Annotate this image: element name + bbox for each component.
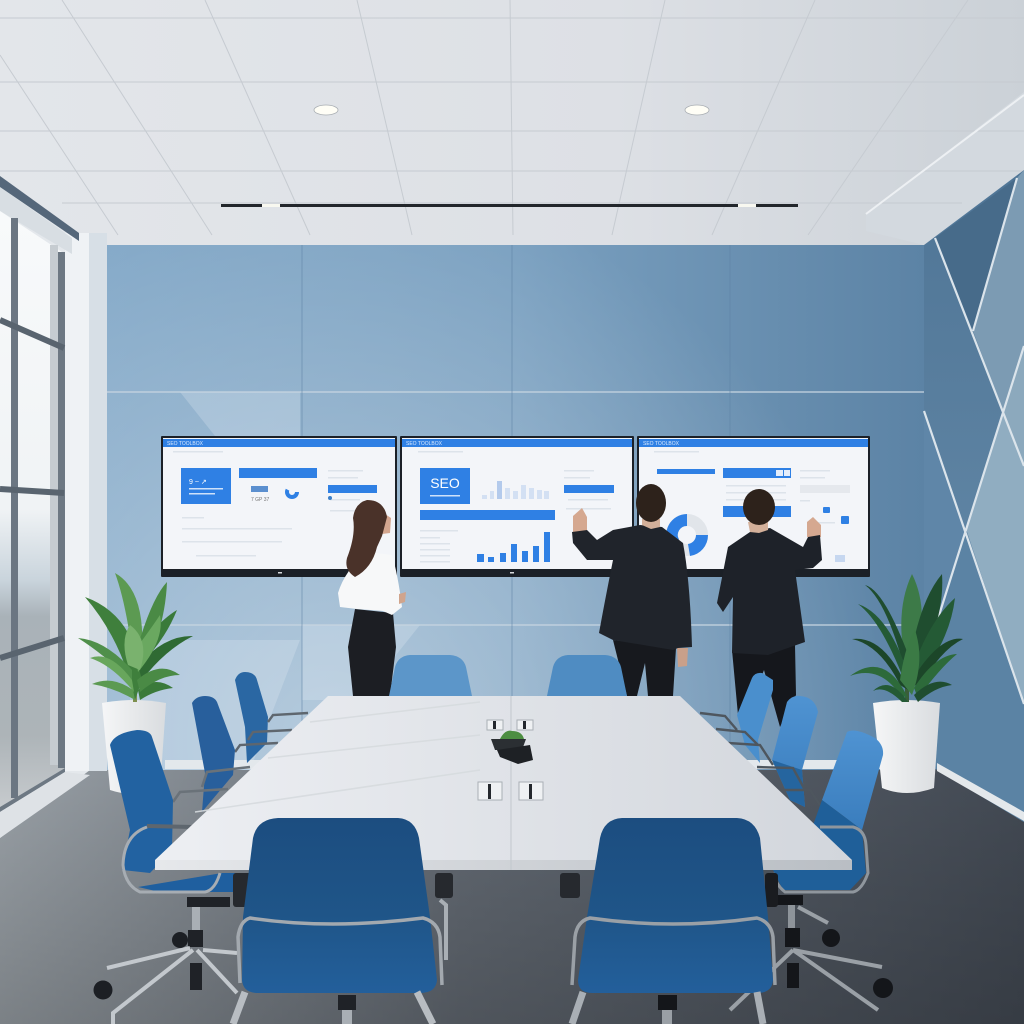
left screen: SEO TOOLBOX <box>167 441 204 447</box>
ceiling downlights <box>314 105 709 115</box>
back wall panels <box>107 245 925 770</box>
center screen <box>400 436 634 577</box>
SEO tile: SEO <box>430 475 460 491</box>
chairs: left side <box>94 672 308 1024</box>
left screen: 9 ~ ↗ <box>189 479 207 486</box>
chair: front left <box>233 818 453 1024</box>
right screen: SEO TOOLBOX <box>643 441 680 447</box>
chairs: far row <box>389 655 627 696</box>
ceiling <box>0 0 1024 246</box>
near left chair <box>94 730 247 1024</box>
person: woman <box>338 500 406 696</box>
table ports <box>478 720 543 800</box>
left screen: 7 GP 37 <box>251 497 269 503</box>
middle right chair <box>757 696 820 807</box>
left screen <box>161 436 397 577</box>
SEO tile <box>420 468 470 504</box>
chairs: right side <box>700 673 893 1010</box>
window wall <box>0 176 107 838</box>
plant: left <box>78 573 193 794</box>
floor <box>0 765 1024 1024</box>
far left chair <box>235 672 308 763</box>
donut chart <box>666 514 708 556</box>
right wall with diagonal pattern <box>924 170 1024 822</box>
near right chair <box>730 730 893 1010</box>
middle left chair <box>173 696 250 812</box>
table plant and speaker <box>491 731 533 764</box>
right screen <box>637 436 870 577</box>
center screen: SEO TOOLBOX <box>406 441 443 447</box>
blue bar chart <box>477 532 550 562</box>
person: man right <box>717 489 822 727</box>
conference table <box>155 696 852 870</box>
far right chair <box>700 673 773 765</box>
person: man left <box>572 484 692 696</box>
plant: right <box>850 574 963 793</box>
chair: front right <box>560 818 778 1024</box>
light bar chart <box>482 481 549 499</box>
linear track light <box>221 204 798 207</box>
